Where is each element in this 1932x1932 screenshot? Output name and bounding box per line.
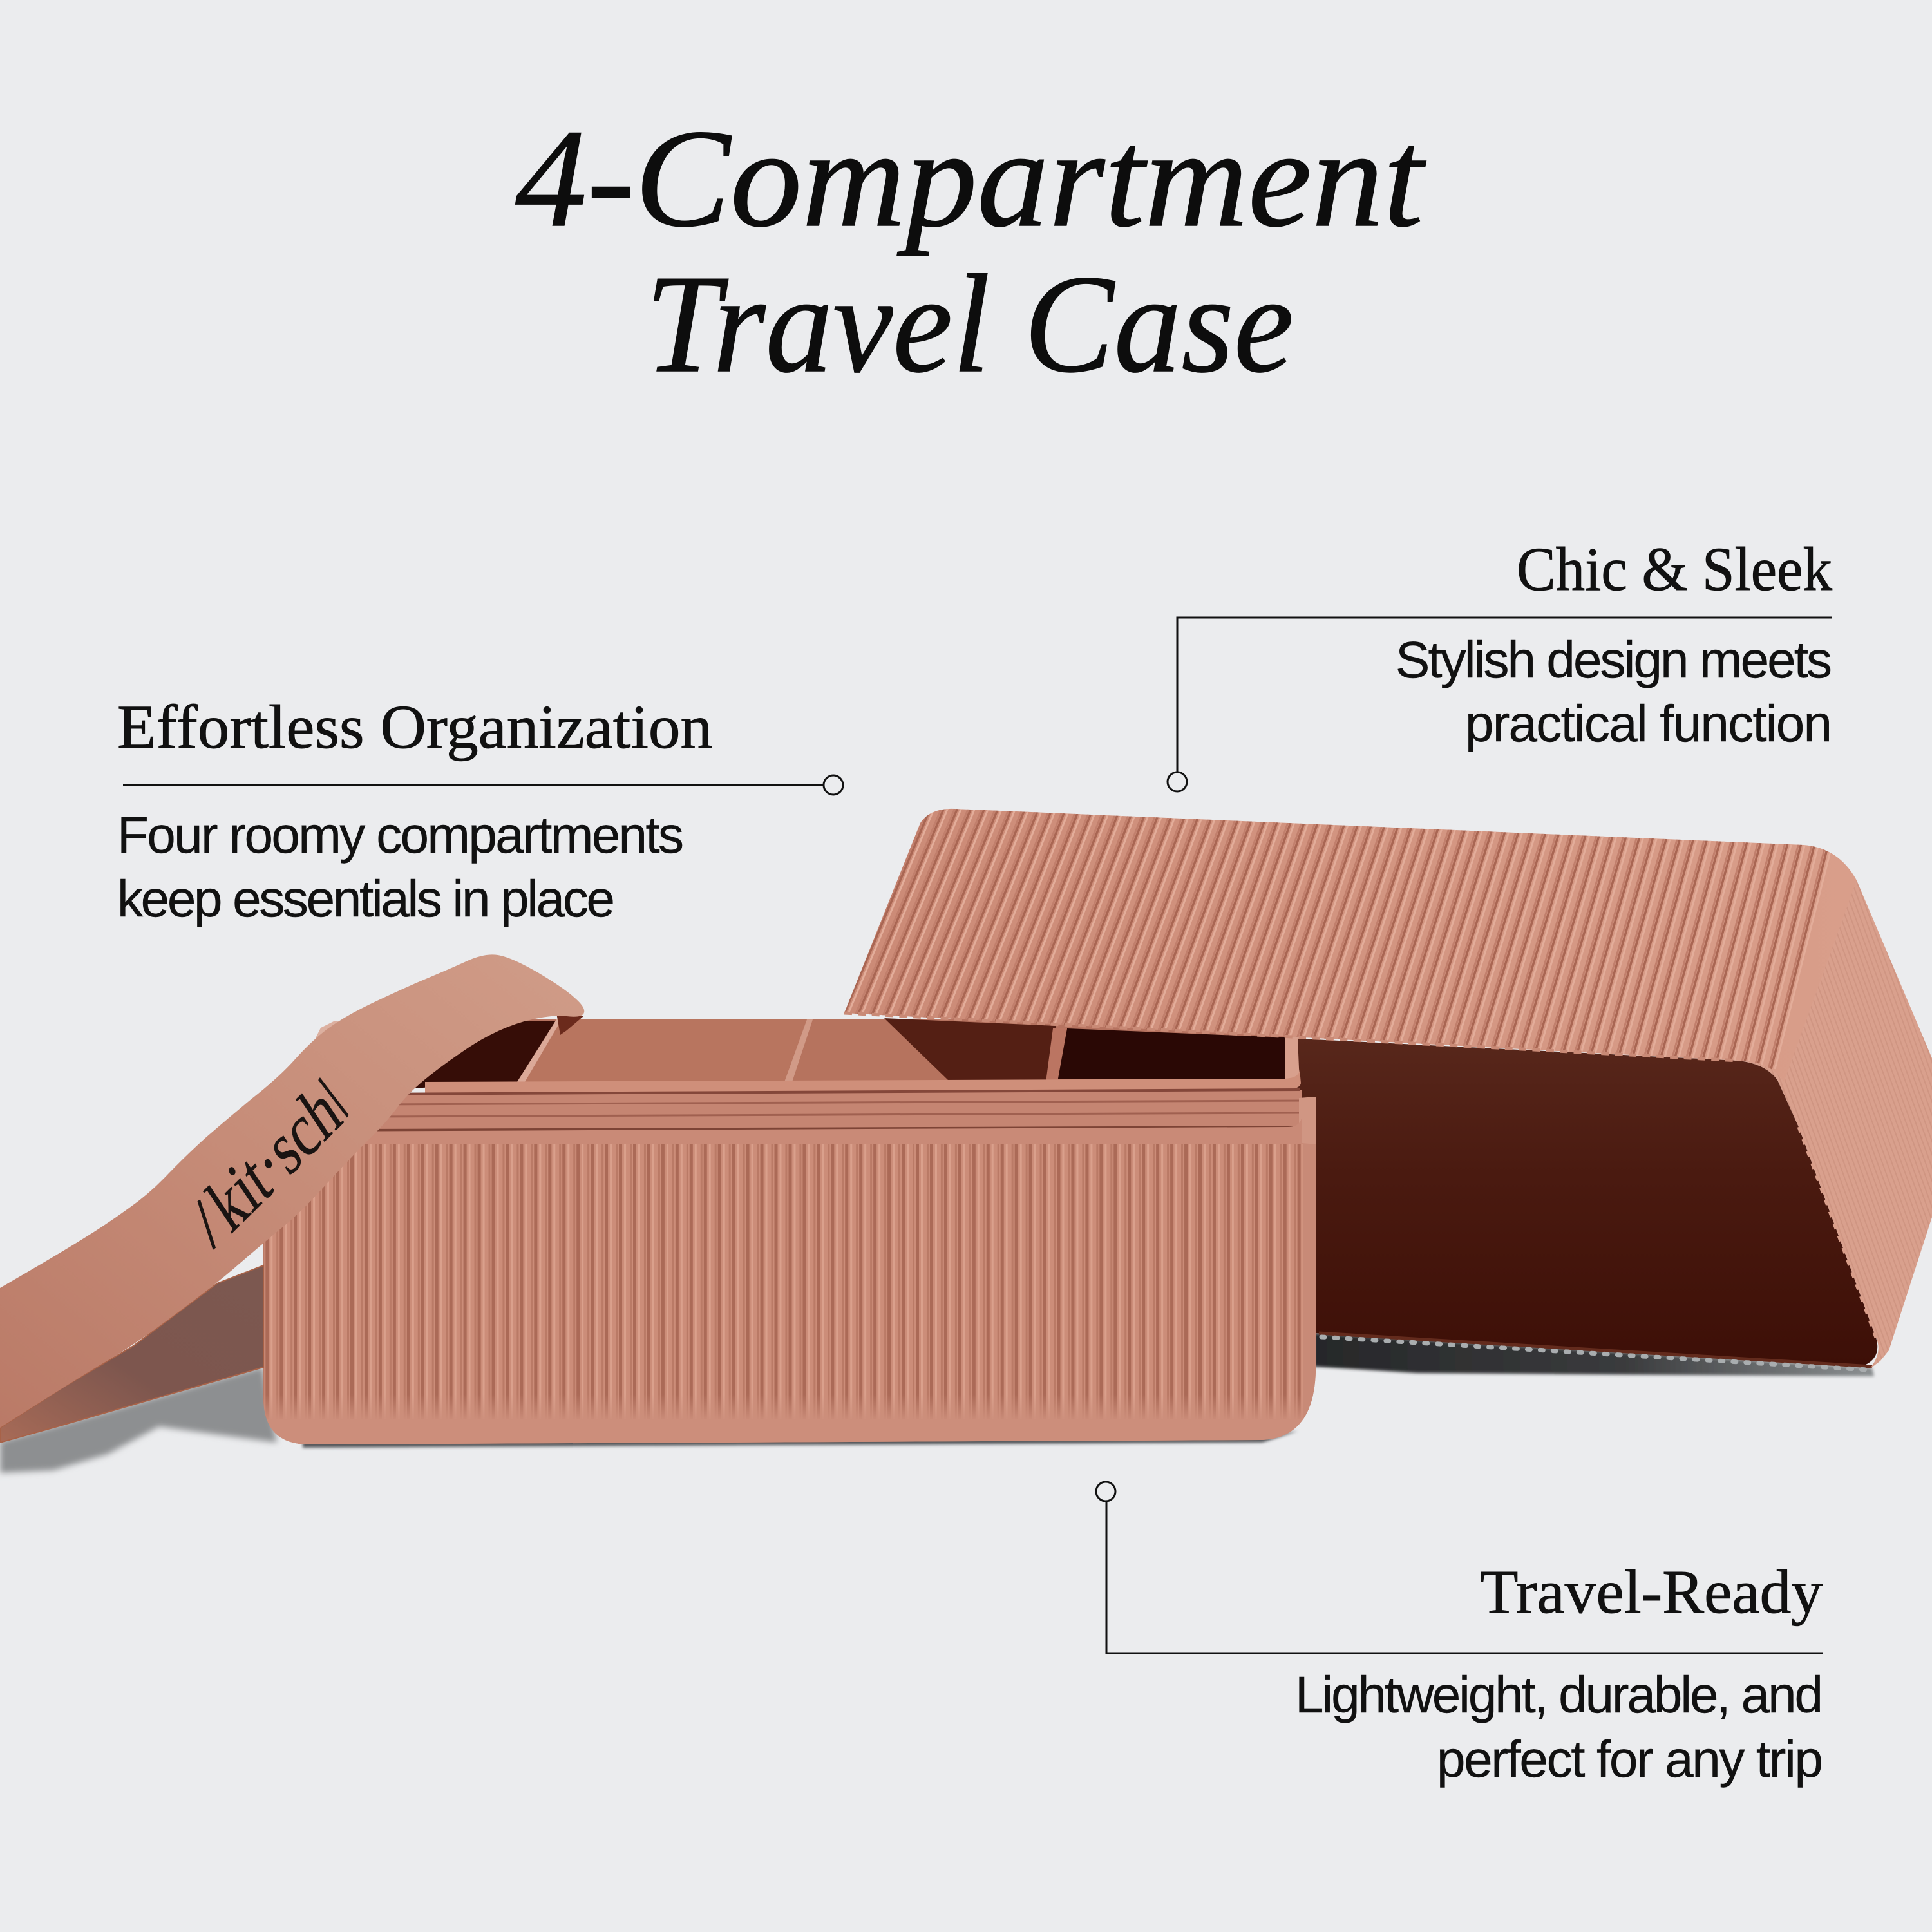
- shadows on the floor: [0, 1333, 1874, 1473]
- callout: Effortless Organization: Four roomy compartments: [117, 806, 684, 864]
- strap underside: [0, 1265, 263, 1443]
- callout: Effortless Organization: keep essentials in place: [117, 870, 615, 927]
- callout: Effortless Organization: Effortless Organization: [117, 692, 712, 761]
- strap logo: /: [297, 1069, 369, 1126]
- lid top face with ribs: [819, 799, 1857, 1082]
- callout: Travel-Ready: Travel-Ready: [1480, 1557, 1823, 1626]
- callout: Chic & Sleek: practical function: [1465, 695, 1832, 752]
- base rim: [283, 1115, 1316, 1150]
- title: 4-Compartment: [515, 101, 1426, 256]
- callout: Chic & Sleek: [1168, 535, 1832, 791]
- lid bottom lip with scallops: [1319, 1333, 1872, 1370]
- callout: Chic & Sleek: Stylish design meets: [1396, 631, 1832, 688]
- callout: Travel-Ready: perfect for any trip: [1437, 1730, 1823, 1788]
- callout: Chic & Sleek: Chic & Sleek: [1517, 535, 1832, 603]
- lid interior: [1288, 1038, 1877, 1365]
- lid side face: [1739, 880, 1932, 1369]
- callout: Travel-Ready: Lightweight, durable, and: [1295, 1666, 1823, 1723]
- strap: [0, 954, 584, 1428]
- tray front lip and horizontal ribs: [361, 1069, 1302, 1132]
- base front with vertical ribs: [258, 1144, 1320, 1449]
- strap logo: kit·sch: [194, 1068, 354, 1248]
- tray interior with compartments: [316, 1013, 1300, 1088]
- base back corner post: [1299, 1097, 1316, 1146]
- strap logo: /: [175, 1186, 239, 1262]
- callout: Travel-Ready: [1096, 1482, 1823, 1788]
- title: [515, 101, 1426, 402]
- product: travel case photo illustration: [0, 799, 1932, 1473]
- callout: Effortless Organization: [117, 692, 843, 927]
- title: Travel Case: [645, 247, 1294, 402]
